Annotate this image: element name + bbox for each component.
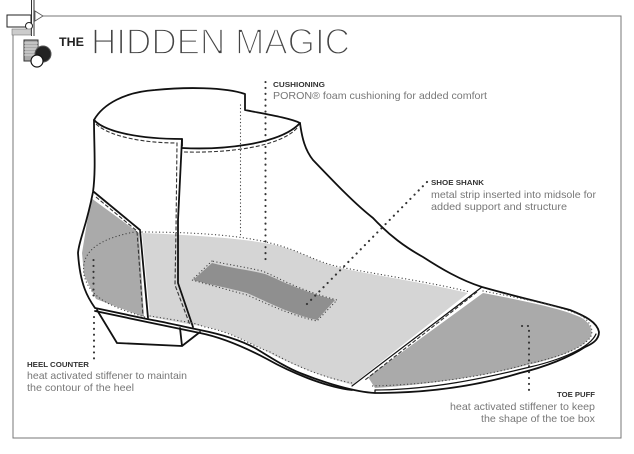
callout: cushioning [273, 80, 487, 102]
boot diagram [78, 88, 599, 393]
heel counter fill [82, 198, 144, 317]
callout: heel counter: heat activated stiffener to maintain [27, 370, 187, 382]
callout: toe puff [450, 390, 596, 425]
callout: cushioning: PORON® foam cushioning for added comfort [273, 90, 487, 102]
callout: heel counter: the contour of the heel [27, 382, 134, 394]
callout: toe puff: heat activated stiffener to keep [450, 401, 595, 413]
leader lines [94, 82, 529, 394]
boot outline [78, 88, 599, 393]
callout: toe puff: the shape of the toe box [481, 413, 596, 425]
midsole fill [142, 233, 468, 385]
icon: logo tab cluster [7, 0, 51, 67]
callout: shoe shank: SHOE SHANK [431, 178, 485, 187]
callout: shoe shank [431, 178, 596, 213]
callout: shoe shank: metal strip inserted into midsole for [431, 189, 596, 201]
shoe shank fill [193, 263, 335, 320]
toe puff fill [368, 293, 592, 388]
stitching [96, 124, 477, 380]
callout: heel counter: HEEL COUNTER [27, 360, 90, 369]
callout: heel counter [27, 360, 187, 394]
callout: cushioning: CUSHIONING [273, 80, 325, 89]
callout: toe puff: TOE PUFF [557, 390, 595, 399]
title: THE [59, 37, 84, 49]
title: HIDDEN MAGIC [91, 21, 350, 62]
callout: shoe shank: added support and structure [431, 201, 567, 213]
dotted outlines [84, 105, 592, 386]
